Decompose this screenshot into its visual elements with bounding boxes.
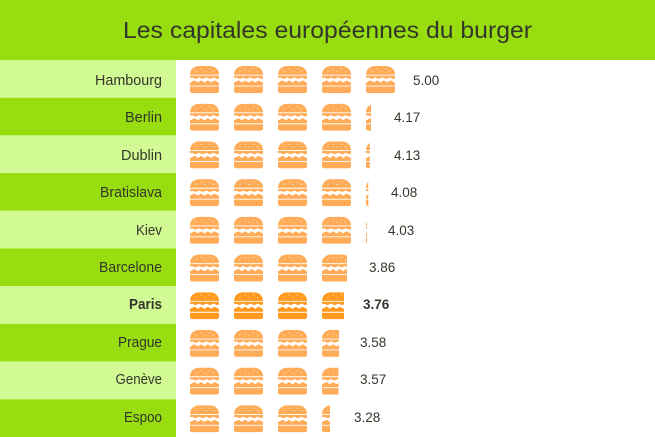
label: Barcelone: Barcelone — [99, 260, 162, 276]
burger row: Hambourg 5.00 — [190, 66, 395, 93]
label: Berlin: Berlin — [125, 110, 162, 126]
burger row: Kiev 4.03 — [190, 217, 395, 244]
title: Les capitales européennes du burger — [123, 17, 532, 43]
label: Bratislava: Bratislava — [100, 185, 163, 201]
title banner — [0, 0, 655, 60]
value: Prague: 3.58 — [360, 335, 386, 350]
label: Genève: Genève — [116, 372, 162, 388]
value: Kiev: 4.03 — [388, 223, 414, 238]
label: Paris: Paris — [129, 297, 162, 313]
value: Dublin: 4.13 — [394, 148, 420, 163]
burger row: Genève 3.57 — [190, 368, 351, 395]
label: Dublin: Dublin — [121, 148, 162, 164]
label: Hambourg: Hambourg — [95, 73, 162, 89]
burger row: Bratislava 4.08 — [190, 179, 395, 206]
value: Genève: 3.57 — [360, 372, 386, 387]
label: Prague: Prague — [118, 335, 162, 351]
value: Espoo: 3.28 — [354, 410, 380, 425]
burger row: Prague 3.58 — [190, 330, 351, 357]
burger row: Dublin 4.13 — [190, 141, 395, 168]
label: Espoo: Espoo — [124, 410, 162, 426]
row labels panel — [0, 60, 176, 437]
burger row: Paris 3.76 (highlighted) — [190, 292, 351, 319]
value: Bratislava: 4.08 — [391, 185, 417, 200]
value: Hambourg: 5.00 — [413, 73, 439, 88]
burger row: Berlin 4.17 — [190, 104, 395, 131]
value: Berlin: 4.17 — [394, 110, 420, 125]
burger row: Espoo 3.28 — [190, 405, 351, 432]
label: Kiev: Kiev — [136, 223, 163, 239]
value: Barcelone: 3.86 — [369, 260, 395, 275]
value: Paris: 3.76 — [363, 297, 390, 312]
burger row: Barcelone 3.86 — [190, 254, 351, 282]
